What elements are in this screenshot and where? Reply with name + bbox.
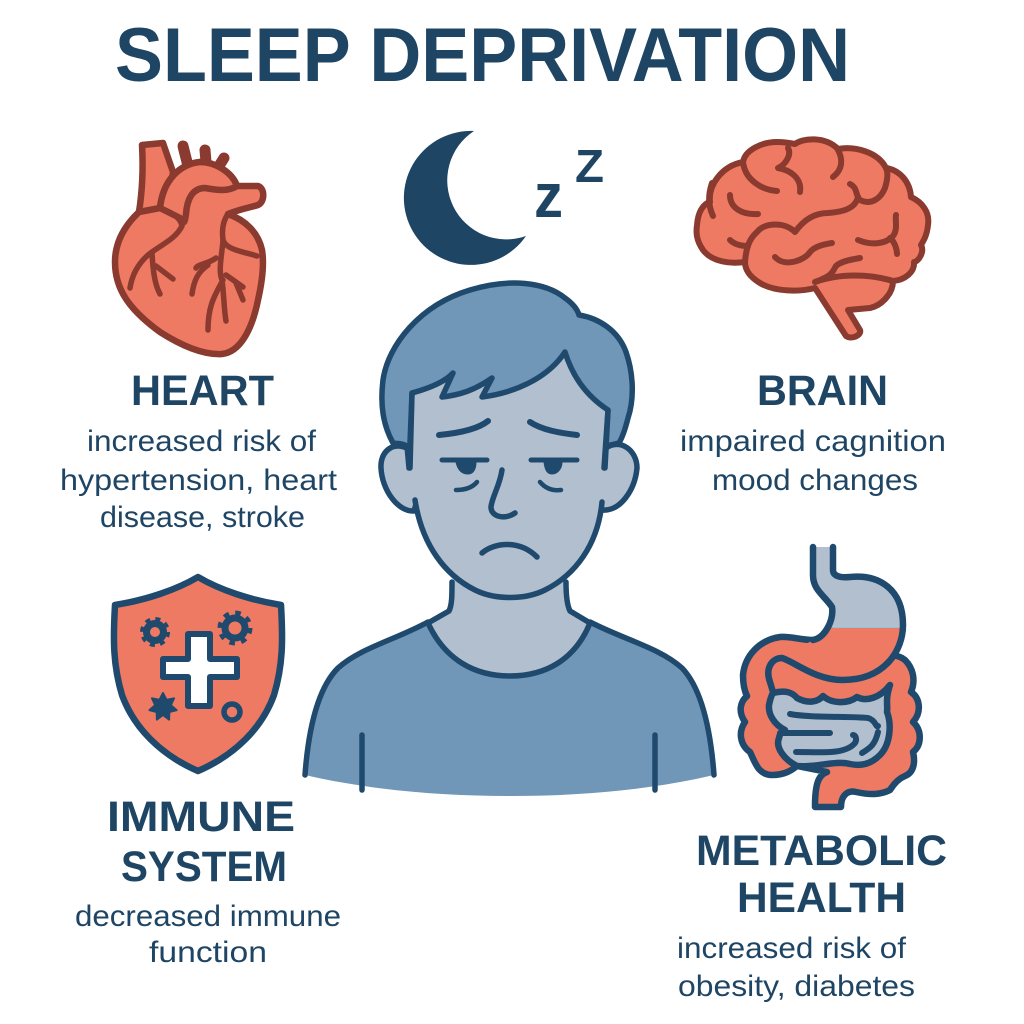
heading: metabolic health: METABOLIC [696, 827, 947, 875]
icon: brain [697, 139, 928, 337]
text: metabolic effects [677, 932, 915, 1003]
small z: z [534, 162, 563, 231]
text: brain effects: impaired cagnition [680, 425, 946, 458]
nose [491, 470, 515, 517]
hair [382, 283, 632, 468]
text: heart effects: disease, stroke [100, 501, 305, 534]
heading: metabolic health: HEALTH [737, 874, 906, 922]
text: brain effects: mood changes [712, 464, 918, 497]
text: heart effects: increased risk of [87, 425, 317, 458]
icon: digestive system [741, 547, 920, 807]
heading: immune system [107, 793, 295, 891]
text: metabolic effects: obesity, diabetes [678, 970, 915, 1003]
text: immune effects: function [149, 936, 267, 969]
text: immune effects: decreased immune [75, 900, 341, 933]
text: immune effects [75, 900, 341, 969]
panel: brain [680, 139, 946, 497]
eyebrows [439, 421, 577, 435]
icon: shield [114, 577, 282, 771]
tired eyes [442, 460, 577, 472]
small intestine [769, 685, 890, 766]
heading: heart: HEART [131, 367, 274, 415]
panel: metabolic health [677, 547, 947, 1003]
text: brain effects [680, 425, 946, 497]
heading: immune system: SYSTEM [121, 843, 287, 891]
panel: immune system [75, 577, 341, 969]
face [410, 340, 612, 598]
ears [381, 446, 420, 511]
illustration: tired person [305, 283, 714, 796]
icon: crescent moon [404, 131, 526, 265]
eye bags [456, 482, 561, 490]
icon: heart [115, 143, 263, 354]
icon: moon and zzz [404, 131, 604, 265]
heading: brain: BRAIN [757, 367, 888, 415]
frown [482, 544, 537, 557]
title: SLEEP DEPRIVATION [115, 13, 850, 98]
large intestine [741, 637, 920, 807]
large z: Z [575, 140, 604, 192]
text: metabolic effects: increased risk of [677, 932, 907, 965]
neck [428, 580, 590, 676]
text: heart effects: hypertension, heart [60, 464, 338, 497]
text: heart effects [60, 425, 338, 534]
panel: heart [60, 143, 338, 534]
hair-face seam [410, 393, 608, 468]
shirt [305, 622, 714, 796]
stomach [782, 600, 903, 680]
heading: metabolic health [696, 827, 947, 922]
heading: immune system: IMMUNE [107, 793, 295, 841]
